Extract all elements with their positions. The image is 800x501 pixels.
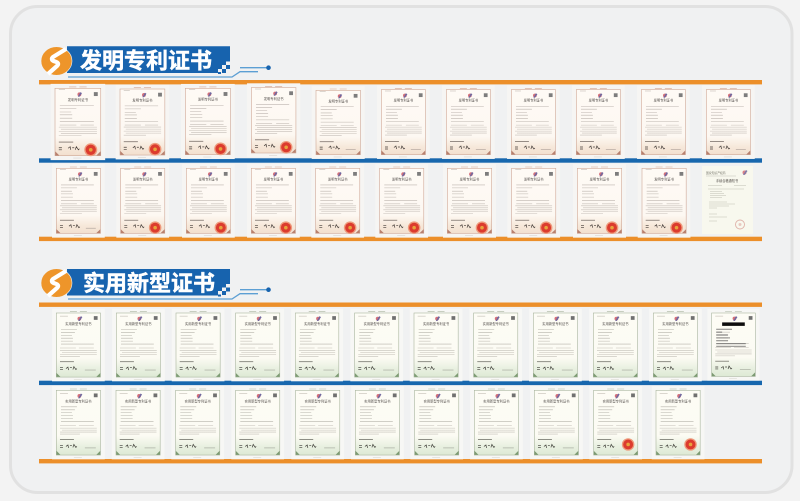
certificate: 发明专利证书 xyxy=(394,98,414,103)
panel: invention certificates row 1 xyxy=(51,83,755,160)
certificate xyxy=(637,85,690,159)
pixel squares xyxy=(218,288,230,296)
certificate: 实用新型专利证书 xyxy=(245,321,272,326)
certificate: 实用新型专利证书 xyxy=(542,321,569,326)
orange rule xyxy=(39,302,762,307)
certificate: 实用新型专利证书 xyxy=(364,398,391,403)
certificate xyxy=(375,164,428,238)
certificate with redacted title xyxy=(707,309,760,381)
certificate xyxy=(443,164,496,238)
certificate: 发明专利证书 xyxy=(590,176,610,181)
certificate xyxy=(312,86,365,159)
certificate: 发明专利证书 xyxy=(459,98,479,103)
notice document: 国家知识产权局 xyxy=(706,171,726,175)
certificate: 发明专利证书 xyxy=(460,176,480,181)
certificate xyxy=(171,386,224,459)
certificate xyxy=(638,164,690,238)
certificate xyxy=(470,386,523,459)
certificate: 发明专利证书 xyxy=(719,98,739,103)
certificate: 实用新型专利证书 xyxy=(424,398,451,403)
certificate with seal xyxy=(652,386,704,459)
orange rule xyxy=(39,80,762,84)
certificate: 发明专利证书 xyxy=(328,98,349,103)
certificate xyxy=(247,164,300,238)
certificate xyxy=(291,386,344,459)
certificate xyxy=(247,83,300,157)
heading text: 实用新型证书 xyxy=(83,271,215,296)
icon: orange logo xyxy=(41,47,72,75)
pixel squares xyxy=(218,65,230,74)
certificate xyxy=(507,85,560,159)
certificate xyxy=(442,85,495,159)
circuit lines xyxy=(68,68,268,77)
certificate: 实用新型专利证书 xyxy=(304,321,331,326)
certificate: 实用新型专利证书 xyxy=(423,321,450,326)
certificate xyxy=(702,85,755,159)
certificate: 实用新型专利证书 xyxy=(305,398,332,403)
blue rule xyxy=(39,381,762,385)
certificate: 实用新型专利证书 xyxy=(483,398,510,403)
certificate xyxy=(51,84,105,160)
certificate: 实用新型专利证书 xyxy=(662,321,689,326)
certificate xyxy=(112,309,165,381)
certificate xyxy=(649,309,702,381)
certificate xyxy=(172,309,224,381)
certificate xyxy=(52,386,105,459)
certificate xyxy=(52,309,105,381)
certificate: 发明专利证书 xyxy=(199,176,219,181)
certificate: 实用新型专利证书 xyxy=(483,321,510,326)
certificate: 发明专利证书 xyxy=(654,176,675,181)
certificate xyxy=(112,386,164,459)
certificate xyxy=(291,309,343,381)
certificate xyxy=(469,309,522,381)
certificate: 发明专利证书 xyxy=(264,96,284,101)
certificate: 发明专利证书 xyxy=(524,176,544,181)
circuit lines xyxy=(68,290,268,299)
certificate xyxy=(116,164,169,238)
certificate: 实用新型专利证书 xyxy=(65,321,92,326)
heading banner xyxy=(67,269,230,296)
certificate: 实用新型专利证书 xyxy=(245,398,272,403)
heading text: 发明专利证书 xyxy=(80,48,212,74)
certificate: 实用新型专利证书 xyxy=(364,321,391,326)
certificate: 实用新型专利证书 xyxy=(602,321,629,326)
orange rule xyxy=(39,459,762,463)
certificate with seal: 实用新型专利证书 xyxy=(603,398,630,403)
certificate xyxy=(351,386,404,459)
certificate xyxy=(350,309,403,381)
certificate: 实用新型专利证书 xyxy=(65,398,92,403)
notice document: 手续合格通知书 xyxy=(716,178,739,183)
certificate: 发明专利证书 xyxy=(524,98,544,103)
notice document xyxy=(702,166,753,234)
section heading: invention patents xyxy=(41,46,271,77)
certificate xyxy=(181,84,235,159)
certificate with seal xyxy=(589,386,642,459)
panel: utility certificates row 1 xyxy=(52,309,760,381)
certificate xyxy=(52,164,105,238)
certificate xyxy=(589,309,642,381)
certificate: 发明专利证书 xyxy=(133,176,153,181)
certificate xyxy=(311,164,364,238)
panel: utility certificates row 2 xyxy=(52,386,704,459)
panel: invention certificates row 2 xyxy=(52,164,753,238)
certificate xyxy=(410,386,463,459)
certificate: 实用新型专利证书 xyxy=(185,321,212,326)
certificate xyxy=(231,309,284,381)
heading banner xyxy=(67,46,230,73)
certificate: 实用新型专利证书 xyxy=(185,398,212,403)
certificate: 发明专利证书 xyxy=(264,176,284,181)
certificate xyxy=(529,309,582,381)
certificate: 发明专利证书 xyxy=(392,176,412,181)
icon: orange logo xyxy=(41,269,72,297)
certificate xyxy=(231,386,284,459)
certificate xyxy=(116,85,169,159)
certificate: 发明专利证书 xyxy=(69,176,89,181)
certificate with seal: 实用新型专利证书 xyxy=(665,398,692,403)
certificate xyxy=(572,85,625,159)
certificate xyxy=(507,164,560,238)
certificate xyxy=(410,309,462,381)
orange rule xyxy=(39,237,762,241)
blue rule xyxy=(39,158,762,163)
certificate: 发明专利证书 xyxy=(132,97,153,102)
certificate: 实用新型专利证书 xyxy=(543,398,570,403)
certificate: 实用新型专利证书 xyxy=(125,321,152,326)
certificate: 发明专利证书 xyxy=(68,97,89,102)
certificate: 发明专利证书 xyxy=(198,97,218,102)
certificate: 实用新型专利证书 xyxy=(125,398,152,403)
certificate: 发明专利证书 xyxy=(654,98,674,103)
certificate xyxy=(573,164,626,238)
certificate: 发明专利证书 xyxy=(328,176,348,181)
certificate xyxy=(182,164,235,238)
certificate: 发明专利证书 xyxy=(589,98,609,103)
certificate xyxy=(530,386,583,459)
section heading: utility model patents xyxy=(41,269,271,299)
certificate xyxy=(377,85,430,159)
